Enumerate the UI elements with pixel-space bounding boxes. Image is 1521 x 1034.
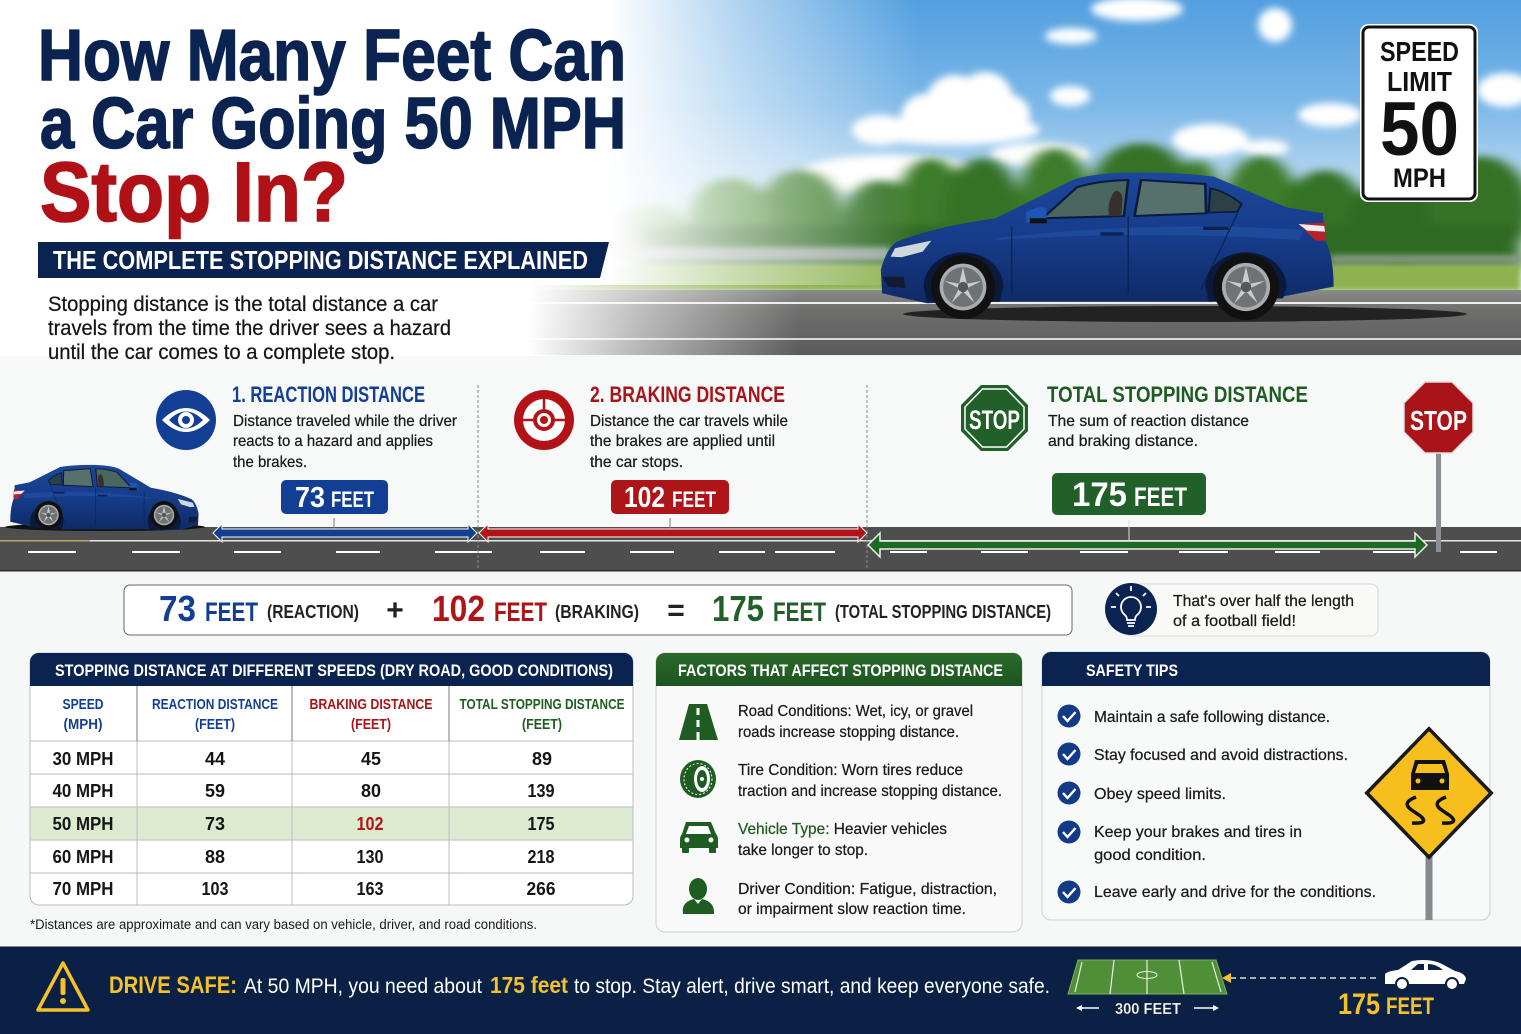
badge: 175 feet: FEET	[1134, 482, 1187, 512]
tip 1	[1058, 704, 1330, 728]
drive safe message: to stop. Stay alert, drive smart, and keep everyone safe.	[574, 975, 1050, 998]
speed limit sign: SPEED	[1380, 36, 1459, 67]
column headers: BRAKING DISTANCE	[310, 696, 432, 713]
equation box: 102	[432, 588, 485, 629]
tip 4: good condition.	[1094, 847, 1206, 864]
arrow: total stopping distance	[868, 520, 1427, 557]
175 feet label: 175	[1338, 988, 1380, 1021]
table header bar: STOPPING DISTANCE AT DIFFERENT SPEEDS (DRY ROAD, GOOD CONDITIONS)	[55, 661, 613, 680]
icon: green stop octagon: STOP	[969, 405, 1020, 435]
icon: football field	[1068, 960, 1227, 994]
tip 4: Keep your brakes and tires in	[1094, 824, 1302, 841]
icon: green stop octagon	[961, 385, 1028, 451]
drive safe message	[109, 972, 1050, 999]
panel: total stopping distance: TOTAL STOPPING DISTANCE	[1047, 382, 1308, 407]
title: a Car Going 50 MPH	[40, 84, 626, 164]
speed limit sign: LIMIT	[1387, 66, 1452, 97]
hero photo: sky, clouds, trees and highway	[0, 0, 1521, 356]
panel: braking distance	[514, 382, 788, 514]
tip 5	[1058, 880, 1376, 904]
tip 5: Leave early and drive for the conditions.	[1094, 884, 1376, 901]
safety tips header: SAFETY TIPS	[1086, 661, 1178, 680]
callout: football field comparison	[1105, 583, 1378, 636]
column headers: (MPH)	[64, 716, 102, 733]
icon: red stop sign on pole	[1404, 382, 1473, 552]
equation box	[124, 585, 1072, 635]
badge: 73 feet: 73	[295, 482, 325, 514]
equation box: (BRAKING)	[555, 602, 639, 622]
factor: road conditions	[679, 703, 973, 741]
equation box: 73	[159, 588, 196, 629]
title	[38, 16, 626, 239]
speed limit sign: MPH	[1393, 163, 1446, 193]
table header bar	[30, 653, 633, 686]
icon: slippery road sign	[1365, 727, 1493, 920]
arrow: reaction distance	[213, 518, 477, 542]
panel: reaction distance: reacts to a hazard and applies	[233, 433, 433, 450]
equation box: FEET	[773, 597, 826, 627]
table rows: 45	[361, 749, 381, 769]
field length label: 300 FEET	[1115, 1001, 1181, 1018]
icon: brake disc	[514, 390, 574, 450]
factor: driver condition	[683, 878, 997, 918]
icon: red stop sign on pole: STOP	[1410, 405, 1467, 436]
table rows: 102	[356, 814, 384, 834]
section dividers	[478, 385, 867, 570]
table footnote: *Distances are approximate and can vary based on vehicle, driver, and road conditions.	[30, 917, 537, 932]
tip 2: Stay focused and avoid distractions.	[1094, 747, 1348, 764]
column headers: (FEET)	[351, 716, 391, 733]
factor: tire condition: Tire Condition: Worn tires reduce	[738, 762, 963, 779]
badge: 175 feet	[1052, 473, 1206, 515]
panel: braking distance: the car stops.	[590, 454, 683, 471]
road strip	[0, 527, 1521, 572]
panel: factors	[656, 653, 1022, 932]
175 feet label	[1338, 988, 1434, 1021]
table rows: 44	[205, 749, 225, 769]
column headers	[62, 696, 624, 733]
factor: vehicle type: Vehicle Type: Heavier vehicles	[738, 821, 947, 838]
panel: reaction distance: 1. REACTION DISTANCE	[232, 382, 425, 407]
table rows: 89	[532, 749, 552, 769]
factors header: FACTORS THAT AFFECT STOPPING DISTANCE	[678, 661, 1003, 680]
speed limit sign	[1360, 24, 1478, 202]
intro paragraph: Stopping distance is the total distance a car	[48, 293, 438, 316]
panel: braking distance: Distance the car travels while	[590, 413, 788, 430]
highlighted 50 mph row	[30, 807, 632, 840]
table rows: 218	[528, 847, 554, 867]
arrow: braking distance	[479, 518, 867, 542]
tip 2	[1058, 742, 1348, 766]
subtitle banner: THE COMPLETE STOPPING DISTANCE EXPLAINED	[53, 245, 588, 275]
panel: reaction distance: Distance traveled while the driver	[233, 413, 458, 430]
intro paragraph: until the car comes to a complete stop.	[48, 341, 395, 364]
table rows: 266	[526, 879, 556, 899]
panel: total stopping distance: and braking distance.	[1048, 433, 1198, 450]
table rows: 70 MPH	[52, 879, 114, 899]
table rows: 40 MPH	[52, 781, 114, 801]
drive safe message: 175 feet	[490, 972, 568, 998]
table rows: 60 MPH	[52, 847, 114, 867]
column headers: TOTAL STOPPING DISTANCE	[460, 696, 624, 713]
panel: braking distance: 2. BRAKING DISTANCE	[590, 382, 785, 407]
factor: driver condition: or impairment slow reaction time.	[738, 901, 966, 918]
equation box: (TOTAL STOPPING DISTANCE)	[835, 602, 1051, 622]
table rows: 88	[205, 847, 225, 867]
table rows: 73	[205, 814, 225, 834]
column headers: REACTION DISTANCE	[152, 696, 278, 713]
equation box: +	[386, 594, 404, 627]
icon: warning triangle	[38, 963, 88, 1010]
drive safe message: DRIVE SAFE:	[109, 972, 237, 999]
factors header	[656, 653, 1022, 686]
table rows: 80	[361, 781, 381, 801]
icon: white car	[1385, 960, 1466, 990]
column headers: (FEET)	[195, 716, 235, 733]
factor: tire condition: traction and increase stopping distance.	[738, 783, 1002, 800]
badge: 73 feet	[281, 480, 388, 514]
tip 1: Maintain a safe following distance.	[1094, 709, 1330, 726]
table rows: 59	[205, 781, 225, 801]
title: Stop In?	[40, 145, 348, 239]
panel: reaction distance: the brakes.	[233, 454, 307, 471]
table rows: 130	[356, 847, 384, 867]
dashed arrow to field	[1222, 973, 1380, 983]
factor: tire condition	[680, 760, 1002, 800]
intro paragraph	[48, 293, 451, 364]
bottom banner	[0, 946, 1521, 1034]
panel: speed table	[30, 653, 633, 905]
panel: braking distance: the brakes are applied until	[590, 433, 775, 450]
factor: vehicle type: take longer to stop.	[738, 842, 868, 859]
panel: total stopping distance: The sum of reaction distance	[1048, 413, 1249, 430]
table rows: 30 MPH	[52, 749, 114, 769]
table rows	[52, 749, 556, 899]
factor: driver condition: Driver Condition: Fatigue, distraction,	[738, 881, 997, 898]
table rows: 50 MPH	[52, 814, 114, 834]
table rows: 175	[528, 814, 554, 834]
badge: 73 feet: FEET	[331, 487, 374, 512]
badge: 175 feet: 175	[1072, 476, 1127, 514]
factor: road conditions: roads increase stopping distance.	[738, 724, 959, 741]
table rows: 163	[356, 879, 384, 899]
equation box: FEET	[205, 597, 258, 627]
small sedan on road	[5, 465, 205, 531]
factor: vehicle type	[680, 821, 947, 859]
speed limit sign: 50	[1380, 87, 1459, 172]
table rows: 139	[528, 781, 554, 801]
tip 3	[1058, 782, 1226, 804]
panel: safety tips	[1042, 652, 1493, 920]
icon: eye	[156, 390, 216, 450]
title: How Many Feet Can	[38, 16, 626, 96]
badge: 102 feet	[611, 480, 729, 514]
badge: 102 feet: FEET	[672, 487, 716, 512]
column headers: (FEET)	[522, 716, 562, 733]
tip 3: Obey speed limits.	[1094, 786, 1226, 803]
badge: 102 feet: 102	[624, 482, 665, 514]
column headers: SPEED	[62, 696, 104, 713]
field length label	[1076, 1001, 1219, 1018]
callout: football field comparison: of a football field!	[1173, 613, 1296, 630]
icon: light bulb	[1105, 583, 1157, 635]
distance strip background	[0, 356, 1521, 528]
safety tips header	[1042, 652, 1490, 686]
factor: road conditions: Road Conditions: Wet, icy, or gravel	[738, 703, 973, 720]
equation box: 175	[712, 588, 764, 629]
hero blue sedan	[881, 172, 1467, 322]
tip 4	[1058, 820, 1302, 864]
drive safe message: At 50 MPH, you need about	[244, 975, 482, 998]
panel: total stopping distance	[961, 382, 1308, 515]
intro paragraph: travels from the time the driver sees a hazard	[48, 317, 451, 340]
table rows: 103	[202, 879, 228, 899]
panel: reaction distance	[156, 382, 458, 514]
175 feet label: FEET	[1386, 993, 1434, 1020]
equation box: =	[667, 594, 685, 627]
callout: football field comparison: That's over half the length	[1173, 593, 1354, 610]
equation box: FEET	[494, 597, 547, 627]
equation box: (REACTION)	[267, 602, 359, 622]
